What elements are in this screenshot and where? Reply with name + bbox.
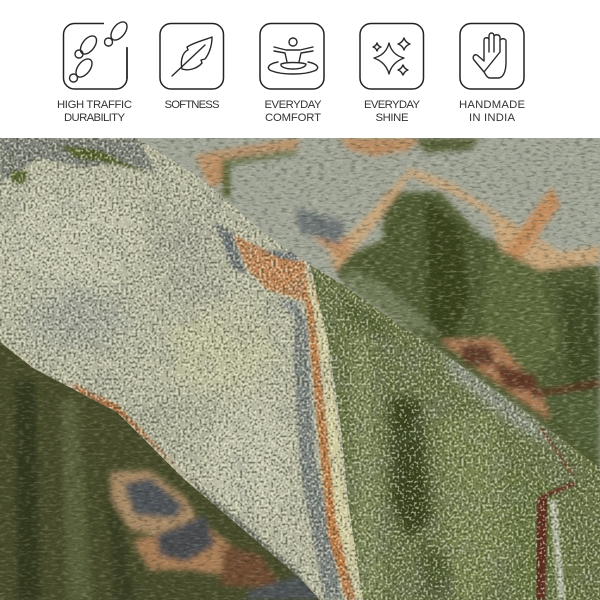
caption: handmade in india: IN INDIA (469, 112, 515, 124)
rug floor background, lower left (0, 342, 325, 600)
gray band beside orange band (295, 300, 342, 600)
caption: everyday shine: SHINE (376, 112, 409, 124)
caption: everyday shine (364, 99, 420, 124)
caption: high traffic durability: HIGH TRAFFIC (57, 99, 132, 111)
rolled rug underside, cream pile (0, 138, 600, 600)
caption: handmade in india (459, 99, 525, 124)
orange band (304, 280, 356, 600)
icon: handmade in india hand (460, 24, 524, 89)
caption: handmade in india: HANDMADE (459, 99, 525, 111)
top-left worn patch (0, 138, 155, 182)
icon: everyday shine sparkles (360, 24, 424, 89)
caption: everyday comfort: EVERYDAY (264, 99, 322, 111)
orange motif near the fold (233, 235, 320, 305)
caption: everyday comfort (264, 99, 322, 124)
icon: high traffic durability footprints (64, 19, 130, 89)
rug photo: rolled corner close-up (0, 138, 600, 600)
cream band (304, 262, 364, 600)
rolled rug, green pile section (300, 260, 600, 600)
icon: everyday comfort meditation (260, 24, 324, 89)
caption: high traffic durability: DURABILITY (64, 112, 125, 124)
brown border lines (540, 428, 575, 600)
caption: high traffic durability (57, 99, 132, 124)
feature icons row (64, 19, 524, 89)
lower edge strip (0, 342, 320, 600)
caption: softness: SOFTNESS (164, 99, 220, 111)
icon: softness feather (160, 24, 224, 89)
pile texture overlay (0, 138, 600, 600)
caption: everyday comfort: COMFORT (265, 112, 321, 124)
rug floor background, upper (0, 138, 600, 600)
feature captions (57, 99, 525, 124)
caption: everyday shine: EVERYDAY (364, 99, 420, 111)
